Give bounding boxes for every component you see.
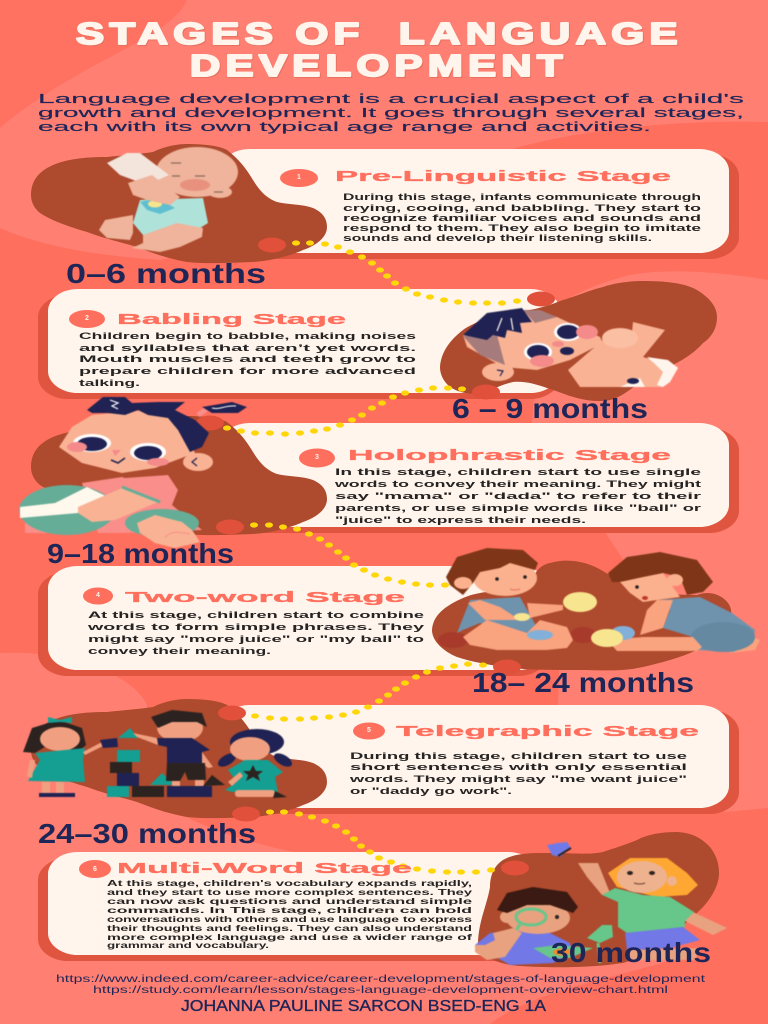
blob: stage 5 [31, 699, 327, 818]
blob: stage 4 [432, 561, 731, 670]
stage 5 body: or "daddy go work". [350, 786, 512, 796]
stage 2 body: talking. [79, 378, 140, 388]
stage 5 body: short sentences with only essential [350, 762, 687, 772]
stage 2 body: Children begin to babble, making noises [79, 331, 416, 341]
blob: stage 3 [31, 416, 327, 535]
stage 3 body: "juice" to express their needs. [335, 515, 586, 525]
stage 2 body: Mouth muscles and teeth grow to [79, 354, 417, 364]
stage 4 badge [83, 588, 113, 604]
connector: stage 4 to 5 [218, 660, 521, 722]
illustration: baby with bottle [99, 147, 238, 252]
blob: stage 6 [478, 832, 719, 967]
stage 1 body: During this stage, infants communicate through [343, 192, 702, 202]
age label 30 months: 30 months [551, 937, 711, 968]
stage 3 body: say "mama" or "dada" to refer to their [335, 491, 702, 501]
title: STAGES OF LANGUAGE [76, 16, 683, 51]
stage 6 body: their thoughts and feelings. They can also understand [107, 924, 472, 933]
stage 4 body [86, 610, 426, 656]
stage 5 body: words. They might say "me want juice" [348, 774, 687, 784]
stage 4 body: might say "more juice" or "my ball" to [88, 634, 425, 644]
sources: https://study.com/learn/lesson/stages-language-development-overview-chart.html [93, 984, 668, 996]
stage 2 body: and syllables that aren’t yet words. [79, 343, 416, 353]
stage 1 body: recognize familiar voices and sounds and [343, 213, 702, 223]
connector: stage 3 to 4 [216, 520, 449, 588]
stage 5 body [348, 751, 687, 796]
intro text: growth and development. It goes through several stages, [38, 105, 744, 120]
panel: stage 2 card [38, 289, 560, 399]
stage 2 body: prepare children for more advanced [79, 366, 417, 376]
age label 9-18 months: 9–18 months [47, 538, 234, 569]
stage 5 badge: 5 [367, 727, 371, 734]
stage 1 badge [280, 169, 318, 187]
panel: stage 3 card [220, 423, 739, 533]
stage 6 heading: Multi-Word Stage [117, 860, 412, 877]
age label 0-6 months: 0–6 months [66, 258, 266, 289]
blob: stage 2 [440, 281, 717, 401]
title: DEVELOPMENT [190, 48, 568, 83]
stage 3 badge [299, 448, 335, 468]
intro text: each with its own typical age range and activities. [38, 119, 651, 134]
connector: stage 1 to 2 [258, 238, 555, 306]
blob: stage 1 [31, 144, 327, 263]
panel: stage 5 card [220, 705, 739, 814]
stage 1 body: crying, cooing, and babbling. They start to [343, 203, 702, 213]
stage 6 body [107, 879, 473, 950]
stage 5 heading: Telegraphic Stage [396, 723, 699, 740]
stage 6 body: can now ask questions and understand simple [107, 897, 473, 906]
stage 1 body: sounds and develop their listening skills. [343, 233, 652, 243]
stage 3 heading: Holophrastic Stage [348, 447, 671, 464]
stage 4 heading: Two-word Stage [125, 589, 405, 606]
stage 3 badge: 3 [315, 454, 319, 461]
stage 2 badge [69, 310, 105, 328]
stage 1 heading: Pre-Linguistic Stage [335, 168, 671, 185]
connector: stage 5 to 6 [232, 806, 529, 876]
stage 6 body: At this stage, children's vocabulary expands rapidly, [107, 879, 472, 888]
stage 2 badge: 2 [85, 315, 89, 322]
panel: stage 1 card [220, 149, 739, 259]
stage 6 body: more complex language and use a wider range of [107, 933, 472, 942]
connector: stage 2 to 3 [196, 384, 500, 437]
stage 4 body: words to form simple phrases. They [86, 622, 426, 632]
age label 6-9 months: 6 – 9 months [452, 393, 648, 424]
intro text [38, 91, 744, 134]
stage 6 body: grammar and vocabulary. [107, 941, 269, 950]
stage 6 badge [79, 860, 111, 878]
stage 2 heading: Babling Stage [117, 311, 346, 328]
stage 3 body [333, 467, 702, 525]
illustration: child with ball [19, 397, 247, 548]
stage 3 body: parents, or use simple words like "ball" or [335, 503, 702, 513]
intro text: Language development is a crucial aspect of a child's [38, 91, 744, 106]
panel: stage 4 card [38, 566, 548, 676]
stage 6 body: and they start to use more complex sentences. They [107, 888, 473, 897]
stage 4 badge: 4 [96, 592, 100, 599]
sources: https://www.indeed.com/career-advice/career-development/stages-of-language-development [56, 973, 705, 985]
stage 6 body: commands. In This stage, children can hold [107, 906, 472, 915]
author credit: JOHANNA PAULINE SARCON BSED-ENG 1A [181, 998, 547, 1015]
illustration: baby lying down [463, 308, 678, 387]
illustration: children exploring [475, 842, 727, 965]
stage 4 body: At this stage, children start to combine [88, 610, 424, 620]
stage 3 body: In this stage, children start to use single [335, 467, 701, 477]
stage 5 body: During this stage, children start to use [350, 751, 687, 761]
illustration: two toddlers playing [438, 548, 760, 653]
age label 24-30 months: 24–30 months [38, 818, 256, 849]
title [76, 16, 683, 83]
stage 6 body: conversations with others and use language to express [107, 915, 473, 924]
sources [56, 973, 705, 996]
age label 18-24 months: 18– 24 months [472, 667, 694, 698]
stage 3 body: words to convey their meaning. They might [333, 479, 701, 489]
stage 1 body [343, 192, 702, 243]
stage 5 badge [353, 722, 385, 740]
stage 1 body: respond to them. They also begin to imitate [343, 223, 701, 233]
stage 2 body [79, 331, 417, 388]
illustration: children with blocks [23, 710, 294, 798]
panel: stage 6 card [38, 852, 538, 961]
stage 6 badge: 6 [93, 866, 97, 873]
stage 4 body: convey their meaning. [88, 646, 271, 656]
stage 1 badge: 1 [297, 174, 301, 181]
